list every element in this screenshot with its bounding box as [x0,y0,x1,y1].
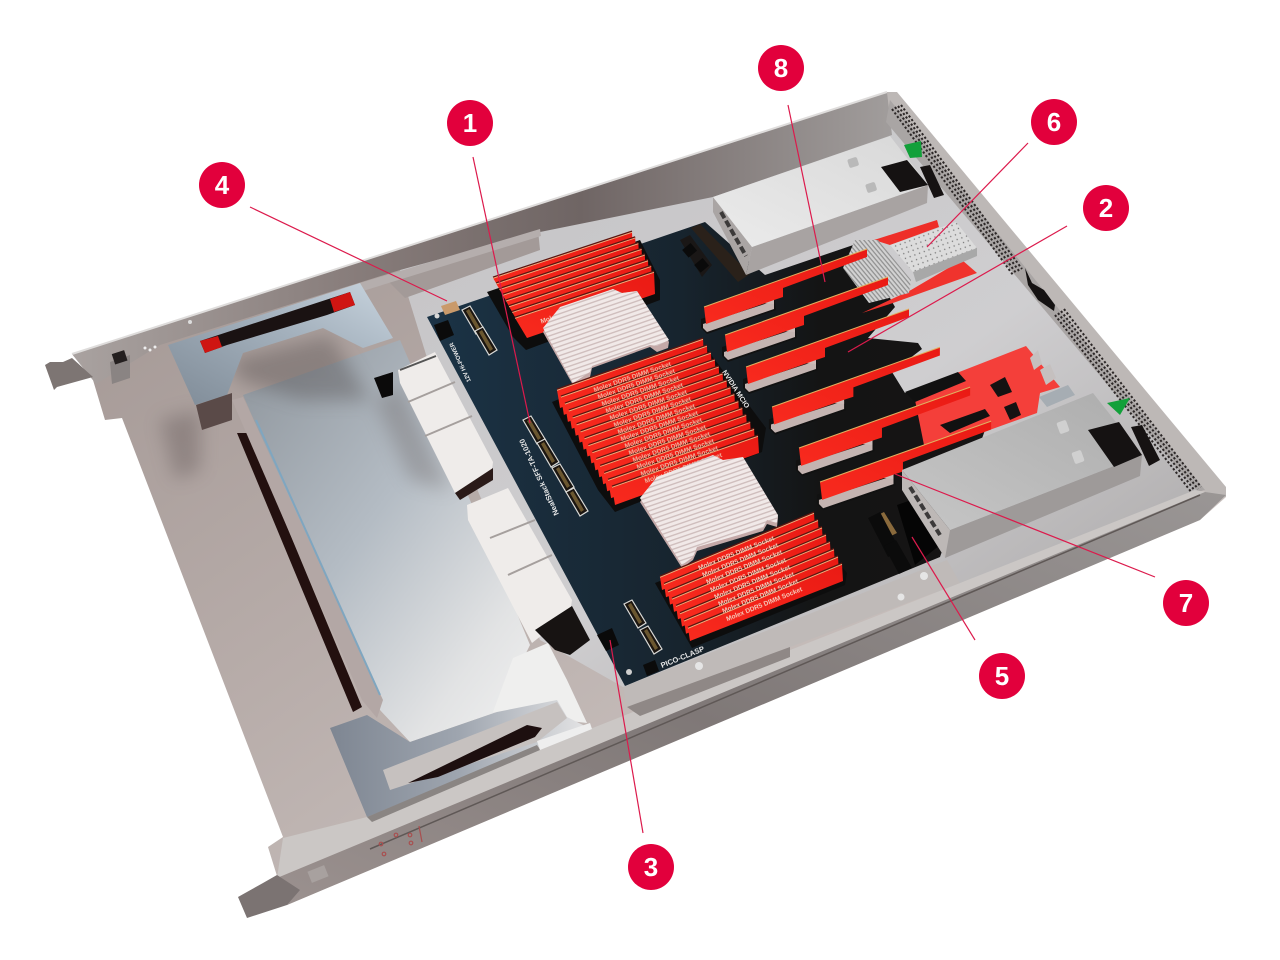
ribbed heatsink [843,240,911,303]
upper card module [843,220,977,313]
board components [990,350,1075,420]
chassis base tray [72,92,1226,905]
board connectors and labels: NeatStack SFF-TA-1020 [517,437,561,517]
lower QSFP cages [467,488,590,655]
lower right red board [905,346,1075,450]
memory bank middle: Molex DDR5 DIMM Socket [609,389,689,422]
memory bank middle: Molex DDR5 DIMM Socket [613,396,693,429]
wall slot [1025,268,1055,311]
floor shadows [160,335,450,490]
chassis right-side floor [400,122,1200,687]
label 8 [758,45,825,282]
memory bank lower: Molex DDR5 DIMM Socket [701,542,780,579]
memory bank middle: Molex DDR5 DIMM Socket [636,438,716,471]
main circuit board [427,222,990,686]
memory bank middle: Molex DDR5 DIMM Socket [640,445,720,478]
memory bank middle: Molex DDR5 DIMM Socket [624,417,704,450]
right perforated wall [886,92,1226,497]
memory bank middle: Molex DDR5 DIMM Socket [644,452,724,485]
board connectors and labels: PICO-CLASP [659,644,706,670]
upper QSFP cages [398,352,493,500]
memory bank lower: Molex DDR5 DIMM Socket [725,586,804,623]
PSU latch green [904,141,922,158]
label 6 [927,99,1077,247]
transceiver cage [890,222,977,272]
board connectors and labels: NVIDIA MCIO [720,369,750,410]
label 2: 2 [1099,193,1113,223]
power connectors beside PSU [680,224,750,282]
label 7 [895,474,1209,626]
bracket red card ends [200,336,222,353]
heatsink upper [543,289,669,385]
memory bank lower: Molex DDR5 DIMM Socket [697,535,776,572]
memory bank lower [655,512,847,648]
rear ports and flange [110,320,192,384]
label 5: 5 [995,661,1009,691]
memory bank middle: Molex DDR5 DIMM Socket [593,361,673,394]
front rail [277,490,1226,905]
label 5 [912,537,1025,699]
board connectors and labels [434,301,940,676]
label 7: 7 [1179,588,1193,618]
memory bank middle: Molex DDR5 DIMM Socket [617,403,697,436]
label 8: 8 [774,53,788,83]
memory bank lower: Molex DDR5 DIMM Socket [717,571,796,608]
lower riser bracket [330,643,592,822]
memory bank middle [552,338,766,512]
lower PSU [902,393,1160,558]
memory bank middle: Molex DDR5 DIMM Socket [597,368,677,401]
label 1 [447,100,530,423]
lower PSU socket [1088,422,1142,467]
riser board and connectors [232,397,383,718]
riser cards [701,249,991,510]
label 2 [848,185,1129,352]
memory bank lower: Molex DDR5 DIMM Socket [709,557,788,594]
memory bank upper [487,231,660,350]
memory bank middle: Molex DDR5 DIMM Socket [620,410,700,443]
label 4: 4 [215,170,230,200]
top PSU [713,136,944,275]
memory bank upper: Molex DDR5 DIMM Socket [540,293,620,325]
memory bank lower: Molex DDR5 DIMM Socket [705,549,784,586]
label 6: 6 [1047,107,1061,137]
bottom handle [238,875,300,918]
heatsink lower [640,455,778,568]
chassis centre floor steel [243,340,530,742]
front plate of board [623,560,960,716]
label 1: 1 [463,108,477,138]
memory bank middle: Molex DDR5 DIMM Socket [601,375,681,408]
label 3 [610,640,674,890]
memory bank middle: Molex DDR5 DIMM Socket [632,431,712,464]
left handle [45,358,93,390]
PSU socket [881,160,928,192]
label 3: 3 [644,852,658,882]
board connectors and labels: 12V Hi-POWER [449,341,473,383]
rear wall of chassis [72,92,892,384]
memory bank lower: Molex DDR5 DIMM Socket [721,578,800,615]
memory bank middle: Molex DDR5 DIMM Socket [605,382,685,415]
lower PSU latch green [1107,398,1130,415]
top riser bracket [168,283,393,430]
front ports [379,826,422,856]
label 4 [199,162,447,301]
memory bank lower: Molex DDR5 DIMM Socket [713,564,792,601]
memory bank middle: Molex DDR5 DIMM Socket [628,424,708,457]
